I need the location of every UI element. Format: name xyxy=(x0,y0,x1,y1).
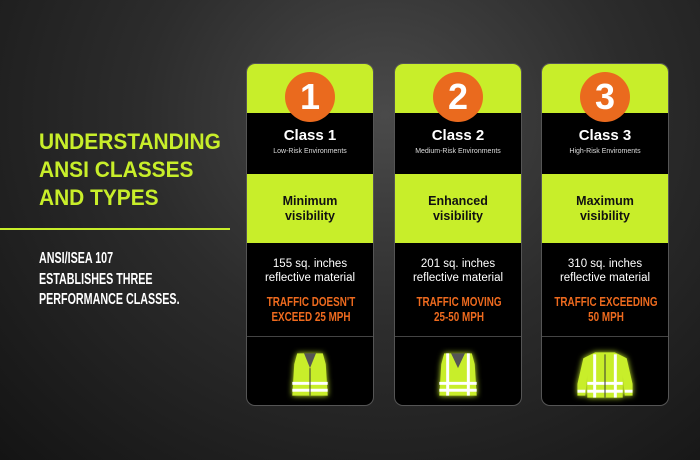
panel: class 1: Low-Risk Environments xyxy=(273,148,347,155)
class name: Class 2 xyxy=(432,127,484,144)
visibility: Enhanced xyxy=(428,194,488,208)
traffic xyxy=(266,294,356,324)
material: 310 sq. inches xyxy=(568,258,642,270)
subtitle xyxy=(39,250,180,308)
number badge 2: 2 xyxy=(448,76,468,117)
traffic: TRAFFIC MOVING xyxy=(416,294,502,309)
icon: jacket xyxy=(572,348,638,402)
visibility xyxy=(395,174,521,243)
traffic: 50 MPH xyxy=(588,309,624,324)
subtitle: PERFORMANCE CLASSES. xyxy=(39,291,180,308)
visibility: visibility xyxy=(433,208,483,222)
material xyxy=(560,258,650,284)
visibility xyxy=(247,174,373,243)
title xyxy=(39,129,221,210)
number badge 2 xyxy=(433,72,483,122)
number badge 1 xyxy=(285,72,335,122)
class name: Class 1 xyxy=(284,127,336,144)
traffic xyxy=(416,294,502,324)
visibility: visibility xyxy=(580,208,630,222)
material: 201 sq. inches xyxy=(421,258,495,270)
subtitle: ESTABLISHES THREE xyxy=(39,270,153,288)
panel: class 2 xyxy=(394,63,522,406)
material: 155 sq. inches xyxy=(273,258,347,270)
traffic: 25-50 MPH xyxy=(434,309,484,324)
panel: class 1 xyxy=(246,63,374,406)
panel: class 2: Medium-Risk Environments xyxy=(415,148,501,155)
material xyxy=(265,258,355,284)
visibility: Maximum xyxy=(576,194,634,208)
class name: Class 3 xyxy=(579,127,631,144)
visibility: Minimum xyxy=(283,194,337,208)
traffic: TRAFFIC DOESN'T xyxy=(267,294,355,309)
number badge 1: 1 xyxy=(300,76,320,117)
icon: vest xyxy=(288,348,332,400)
traffic: TRAFFIC EXCEEDING xyxy=(554,294,658,309)
icon: vest with stripes xyxy=(434,348,482,400)
material: reflective material xyxy=(265,272,355,284)
traffic: EXCEED 25 MPH xyxy=(271,309,351,324)
visibility xyxy=(542,174,668,243)
panel: class 3 xyxy=(541,63,669,406)
number badge 3: 3 xyxy=(595,76,615,117)
subtitle: ANSI/ISEA 107 xyxy=(39,250,113,267)
title: AND TYPES xyxy=(39,185,159,210)
title: ANSI CLASSES xyxy=(39,157,193,182)
material: reflective material xyxy=(413,272,503,284)
material: reflective material xyxy=(560,272,650,284)
visibility: visibility xyxy=(285,208,335,222)
title: UNDERSTANDING xyxy=(39,129,221,154)
number badge 3 xyxy=(580,72,630,122)
traffic xyxy=(554,294,658,324)
material xyxy=(413,258,503,284)
panel: class 3: High-Risk Enviroments xyxy=(569,148,641,155)
